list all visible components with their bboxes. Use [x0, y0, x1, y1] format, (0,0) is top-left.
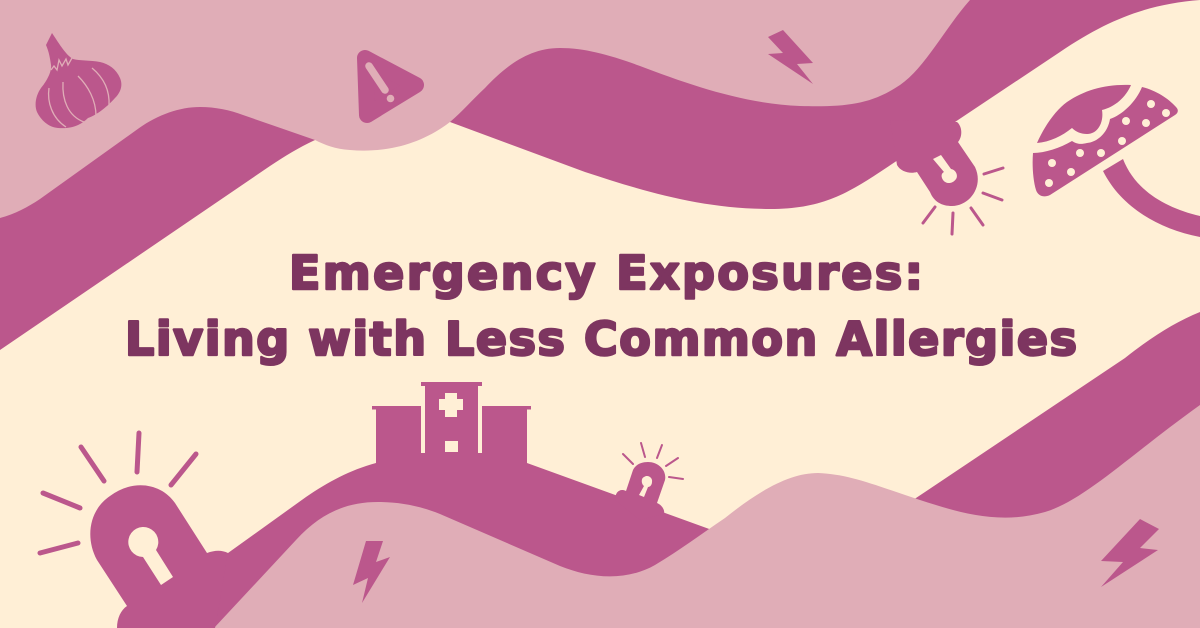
bottom magenta hill: [118, 463, 712, 628]
icon: small siren on hill: [615, 443, 683, 520]
icon: top right siren: [890, 120, 1003, 234]
icon: hospital: [372, 382, 531, 475]
icon: lightning bolt bottom right: [1101, 519, 1159, 587]
icon: mushroom: [1033, 85, 1200, 237]
title line 1: Emergency Exposures:: [289, 246, 923, 300]
title: [125, 246, 1077, 366]
icon: warning triangle: [365, 58, 416, 115]
icon: lightning bolt bottom left: [353, 541, 390, 603]
bottom light pink wave: [214, 405, 1200, 628]
icon: lightning bolt top: [768, 30, 813, 84]
icon: garlic: [36, 33, 121, 128]
bottom right magenta wave band: [880, 312, 1200, 560]
icon: large siren bottom left: [40, 433, 228, 628]
top right magenta wave band: [450, 0, 1200, 209]
top light pink wave: [0, 0, 1000, 300]
title line 2: Living with Less Common Allergies: [125, 312, 1077, 366]
top left magenta wave band: [0, 107, 315, 350]
